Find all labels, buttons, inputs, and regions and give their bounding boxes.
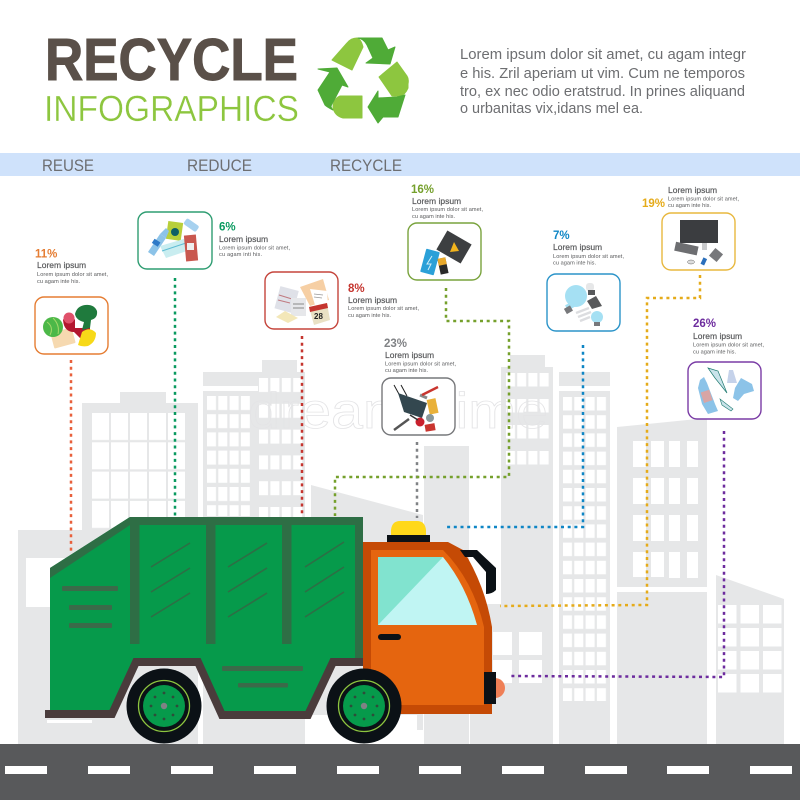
item: plastic and paper packaging 6%: Lorem ipsum dolor sit amet, (219, 246, 290, 252)
item: plastic and paper packaging 6% (138, 212, 290, 269)
item: hazardous and metal 23%: Lorem ipsum dolor sit amet, (385, 362, 456, 368)
truck (45, 517, 505, 744)
item: hazardous and metal 23%: cu agam inte his. (385, 368, 428, 374)
item: plastic and paper packaging 6%: 6% (219, 222, 236, 234)
connector: yellow (500, 275, 700, 606)
item: hazardous and metal 23%: Lorem ipsum (385, 350, 434, 360)
item: paper 8% (265, 272, 419, 329)
item: paper 8%: cu agam inte his. (348, 313, 391, 319)
item: glass and plastic 26%: Lorem ipsum (693, 331, 742, 341)
title: RECYCLE (45, 27, 298, 93)
item: glass and plastic 26% (688, 318, 764, 419)
window reflection (378, 557, 443, 625)
icon: batteries (420, 230, 472, 275)
door handle (378, 634, 401, 640)
item: paper 8%: Lorem ipsum dolor sit amet, (348, 306, 419, 312)
intro text (460, 47, 746, 117)
truck panel scratches (151, 542, 344, 617)
truck ribs (130, 520, 292, 644)
item: paper 8%: Lorem ipsum (348, 295, 397, 305)
icon: food (43, 305, 97, 349)
road (0, 744, 800, 800)
item: hazardous and metal 23%: 23% (384, 338, 407, 350)
item: organic 11%: cu agam inte his. (37, 279, 80, 285)
item: batteries 16% (408, 184, 483, 280)
connector: green (174, 278, 176, 516)
item: glass and plastic 26%: 26% (693, 318, 716, 330)
band: reuse reduce recycle (0, 153, 800, 176)
item: glass and plastic 26%: cu agam inte his. (693, 350, 736, 356)
item: batteries 16%: cu agam inte his. (412, 214, 455, 220)
connector: purple (511, 431, 724, 677)
band: reuse reduce recycle: REUSE (42, 157, 94, 175)
icon: paper stack: 28 (314, 312, 323, 321)
cab door (371, 550, 484, 705)
band: reuse reduce recycle: REDUCE (187, 157, 252, 175)
item: organic 11% (35, 248, 108, 354)
item: organic 11%: 11% (35, 248, 57, 260)
item: glass and plastic 26%: Lorem ipsum dolor sit amet, (693, 342, 764, 348)
item: light bulbs 7%: cu agam inte his. (553, 260, 596, 266)
item: light bulbs 7% (547, 230, 624, 331)
icon: recycle symbol (318, 38, 408, 123)
item: batteries 16%: Lorem ipsum dolor sit amet, (412, 207, 483, 213)
intro text: tro, ex nec odio eratstrud. In prines aliquand (460, 84, 745, 100)
watermark: dreamstime (248, 383, 548, 439)
wheel: rear (126, 668, 202, 744)
title: INFOGRAPHICS (44, 88, 299, 129)
item: light bulbs 7%: Lorem ipsum (553, 242, 602, 252)
icon: bulbs (564, 283, 603, 326)
item: batteries 16%: Lorem ipsum (412, 196, 461, 206)
icon: bottles and cartons (148, 218, 199, 261)
item: electronics 19%: cu agam inte his. (668, 203, 711, 209)
connector: red (301, 336, 303, 516)
item: electronics 19%: Lorem ipsum dolor sit amet, (668, 196, 739, 202)
mirror (460, 550, 496, 594)
cab window (378, 557, 477, 625)
connector: olive (335, 288, 509, 516)
city skyline (18, 355, 784, 744)
icon: computer (674, 220, 723, 265)
truck frame (50, 517, 363, 660)
item: electronics 19%: 19% (642, 198, 665, 210)
wheel: front (326, 668, 402, 744)
item: plastic and paper packaging 6%: Lorem ipsum (219, 234, 268, 244)
item: light bulbs 7%: Lorem ipsum dolor sit amet, (553, 254, 624, 260)
title (44, 27, 299, 129)
item: electronics 19% (642, 185, 739, 270)
icon: glass and bottles (698, 368, 754, 414)
item: hazardous and metal 23% (382, 338, 456, 435)
connector: gray (416, 442, 418, 518)
headlight (485, 678, 505, 698)
band: reuse reduce recycle: RECYCLE (330, 157, 402, 175)
item: electronics 19%: Lorem ipsum (668, 185, 717, 195)
truck vents (62, 586, 303, 688)
item: batteries 16%: 16% (411, 184, 434, 196)
truck chassis (45, 662, 364, 715)
icon: paper stack (274, 279, 330, 325)
item: organic 11%: Lorem ipsum (37, 260, 86, 270)
item: light bulbs 7%: 7% (553, 230, 570, 242)
icon: wheelbarrow and tools (394, 385, 439, 432)
intro text: Lorem ipsum dolor sit amet, cu agam integr (460, 47, 746, 63)
connector: blue (444, 345, 583, 527)
connector: orange (70, 360, 72, 552)
cab (363, 542, 492, 714)
item: organic 11%: Lorem ipsum dolor sit amet, (37, 272, 108, 278)
truck body (50, 517, 363, 715)
item: paper 8%: 8% (348, 283, 365, 295)
intro text: e his. Zril aperiam ut vim. Cum ne temporos (460, 66, 745, 82)
bumper (484, 672, 496, 704)
item: plastic and paper packaging 6%: cu agam inti his. (219, 252, 262, 258)
siren (387, 521, 430, 542)
intro text: o urbanitas vix,idans mel ea. (460, 101, 643, 117)
